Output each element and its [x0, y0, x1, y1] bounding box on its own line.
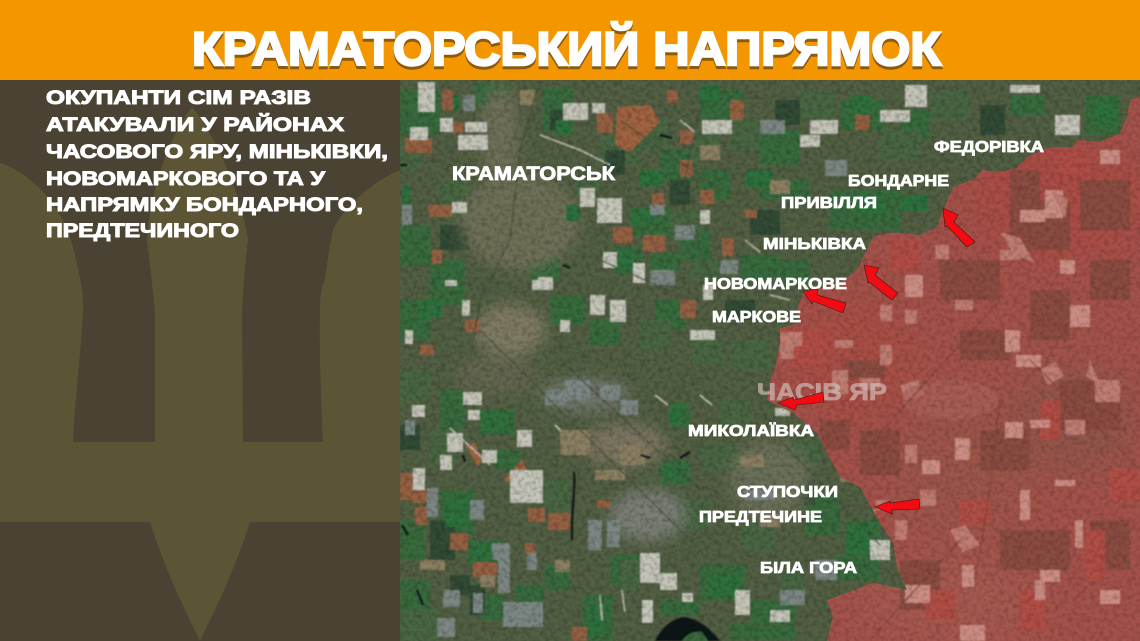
left panel with trident emblem — [0, 80, 400, 641]
fields: tan — [420, 90, 858, 587]
label: Предтечине: ПРЕДТЕЧИНЕ — [699, 509, 822, 526]
occupied territory — [760, 90, 1140, 641]
body text: ОКУПАНТИ СІМ РАЗІВ — [46, 88, 311, 109]
body text: ЧАСОВОГО ЯРУ, МІНЬКІВКИ, — [46, 142, 388, 163]
label: Маркове: МАРКОВЕ — [712, 309, 801, 326]
label: Біла Гора: БІЛА ГОРА — [760, 560, 858, 577]
label: Новомаркове: НОВОМАРКОВЕ — [704, 276, 847, 293]
label: Миколаївка: МИКОЛАЇВКА — [688, 422, 815, 440]
body text: АТАКУВАЛИ У РАЙОНАХ — [46, 114, 344, 136]
arrow: toward Ступочки — [875, 499, 920, 514]
occupied: tonal variation — [799, 140, 1135, 590]
label: Краматорськ: КРАМАТОРСЬК — [452, 164, 615, 185]
body text: ПРЕДТЕЧИНОГО — [46, 221, 239, 242]
fields: white and pale — [405, 82, 1080, 623]
fields: green — [402, 85, 1115, 633]
label: Міньківка: МІНЬКІВКА — [763, 236, 867, 253]
water — [655, 617, 720, 641]
arrow: toward Новомаркове — [803, 289, 846, 313]
occupied: saturated fields — [790, 150, 1140, 630]
fields: thin strips — [450, 120, 790, 620]
arrow: toward Міньківка — [864, 265, 898, 300]
texture — [400, 80, 1140, 641]
map labels — [452, 139, 1045, 577]
label: Бондарне: БОНДАРНЕ — [848, 173, 949, 190]
label: Ступочки: СТУПОЧКИ — [737, 484, 838, 501]
header banner — [0, 0, 1140, 80]
satellite map — [400, 80, 1140, 641]
title: КРАМАТОРСЬКИЙ НАПРЯМОК — [192, 25, 941, 78]
body text: НАПРЯМКУ БОНДАРНОГО, — [46, 195, 363, 216]
patchwork: green — [400, 83, 1120, 641]
fields: brown — [400, 90, 870, 641]
body text: НОВОМАРКОВОГО ТА У — [46, 169, 325, 190]
occupied: darker fields — [820, 170, 1130, 610]
title: КРАМАТОРСЬКИЙ НАПРЯМОК — [192, 22, 941, 75]
occupied: town of Chasiv Yar — [902, 380, 998, 420]
roads — [470, 80, 880, 550]
label: Часів Яр: ЧАСІВ ЯР — [757, 379, 887, 406]
label: Привілля: ПРИВІЛЛЯ — [781, 195, 877, 212]
occupied: pale fields — [872, 149, 1121, 641]
patchwork: muted — [400, 90, 970, 641]
label: Федорівка: ФЕДОРІВКА — [934, 139, 1045, 156]
fields: grey blue — [402, 95, 847, 637]
body text — [46, 88, 388, 242]
patchwork: dark — [400, 100, 1005, 615]
arrow: toward Миколаївка — [778, 392, 824, 410]
urban areas — [455, 85, 812, 541]
emblem: trident — [0, 107, 400, 641]
arrow: toward Бондарне — [943, 208, 975, 247]
